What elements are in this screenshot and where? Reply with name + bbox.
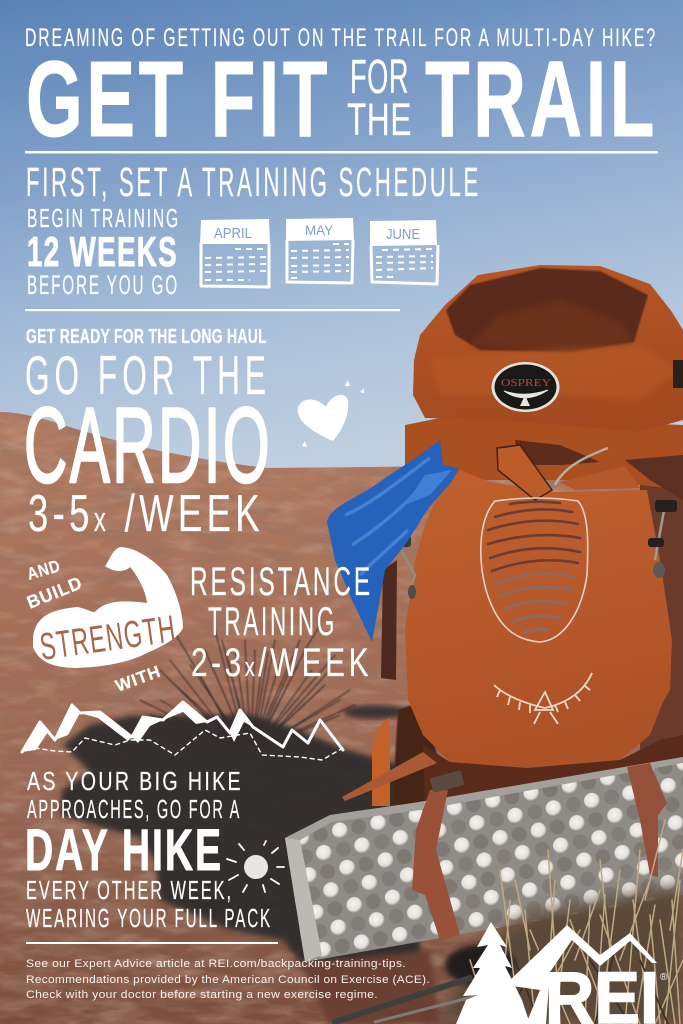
icon: heart — [298, 380, 364, 447]
logo: mountain outline — [505, 925, 657, 1024]
subheading: long haul: GET READY FOR THE LONG HAUL — [26, 326, 267, 348]
strength text: with: WITH — [113, 662, 164, 696]
day hike text block: WEARING YOUR FULL PACK — [26, 903, 272, 933]
icon: flexed arm with strength — [33, 547, 183, 669]
footnote: See our Expert Advice article at REI.com/backpacking-training-tips. — [26, 958, 406, 970]
Osprey badge: OSPREY — [501, 378, 552, 389]
foam sleeping pad — [285, 757, 683, 962]
day hike text block: EVERY OTHER WEEK, — [26, 875, 233, 905]
text block: begin training 12 weeks: 12 WEEKS — [27, 228, 178, 275]
backpack: lid dark panel — [446, 268, 648, 352]
day hike text block: AS YOUR BIG HIKE — [27, 766, 243, 796]
REI logo — [456, 922, 668, 1024]
backpack: printed oval with stripes — [481, 498, 588, 642]
icon: flexed arm with strength: STRENGTH — [37, 608, 179, 669]
icon: May calendar — [286, 218, 354, 283]
footnote: Check with your doctor before starting a new exercise regime. — [26, 989, 378, 1001]
foam pad: right strap — [627, 763, 667, 877]
title: for the: FOR — [350, 51, 409, 104]
cardio text block: 3-5x /WEEK — [28, 485, 264, 543]
footnote — [26, 958, 430, 1001]
background: sky — [0, 0, 683, 480]
icon: May calendar: MAY — [305, 222, 334, 238]
backpack: printed bird logo — [494, 673, 592, 724]
icon: June calendar — [370, 220, 438, 284]
backpack: front pocket — [405, 470, 672, 768]
foam pad: buckle — [430, 770, 465, 793]
text block: begin training 12 weeks — [27, 203, 180, 300]
backpack: lower left dark back panel — [392, 700, 440, 808]
backpack illustration — [327, 265, 683, 812]
strength text: and build: BUILD — [24, 572, 85, 613]
logo: registered mark: ® — [660, 972, 668, 983]
blue down jacket — [327, 440, 458, 642]
cardio text block — [24, 344, 272, 543]
backpack: middle section — [405, 418, 683, 490]
text block: begin training 12 weeks: BEGIN TRAINING — [27, 203, 180, 233]
backpack: top lid — [413, 265, 683, 432]
backpack: dark hanging strap — [381, 560, 397, 680]
icon: April calendar: APRIL — [214, 225, 252, 242]
trekking poles — [335, 978, 480, 1022]
strength text: and build: AND — [25, 556, 63, 584]
title: get fit: GET FIT — [26, 38, 331, 159]
icon: mountain ridge with dotted trail — [22, 702, 343, 760]
title: for the — [347, 51, 412, 145]
icon: April calendar — [200, 219, 270, 287]
cardio text block: GO FOR THE — [25, 344, 271, 406]
logo: tree — [456, 922, 530, 1024]
resistance training text block: TRAINING — [208, 600, 337, 644]
Osprey badge — [492, 362, 560, 412]
day hike text block: APPROACHES, GO FOR A — [27, 794, 241, 824]
backpack: side compression strap — [342, 752, 437, 801]
backpack: orange lower strip — [372, 718, 390, 806]
backpack: bottom belt area — [423, 735, 683, 812]
icon: sun — [227, 841, 284, 892]
shrub shadow on the ground — [60, 705, 440, 1024]
title: for the: THE — [347, 94, 412, 145]
resistance training text block: RESISTANCE — [190, 560, 373, 604]
foam pad: left strap — [412, 790, 460, 940]
cardio text block: CARDIO — [24, 385, 272, 505]
day hike text block: DAY HIKE — [25, 818, 223, 883]
backpack: pocket flap and top strap — [497, 445, 552, 500]
background: desert ground — [0, 412, 683, 1024]
backpack: lid highlight — [430, 345, 680, 400]
footnote: Recommendations provided by the American Council on Exercise (ACE). — [26, 974, 430, 986]
backpack: rear side panel — [640, 465, 683, 770]
backpack: grey cord — [555, 448, 608, 485]
backpack: side cords and toggles — [395, 360, 683, 599]
resistance training text block — [190, 560, 373, 685]
day hike text block — [25, 766, 272, 933]
central dry shrub — [135, 625, 355, 745]
resistance training text block: 2-3x/WEEK — [191, 641, 372, 685]
dry grass in the foreground — [440, 820, 683, 1024]
icon: June calendar: JUNE — [386, 226, 420, 243]
text block: begin training 12 weeks: BEFORE YOU GO — [27, 270, 179, 300]
